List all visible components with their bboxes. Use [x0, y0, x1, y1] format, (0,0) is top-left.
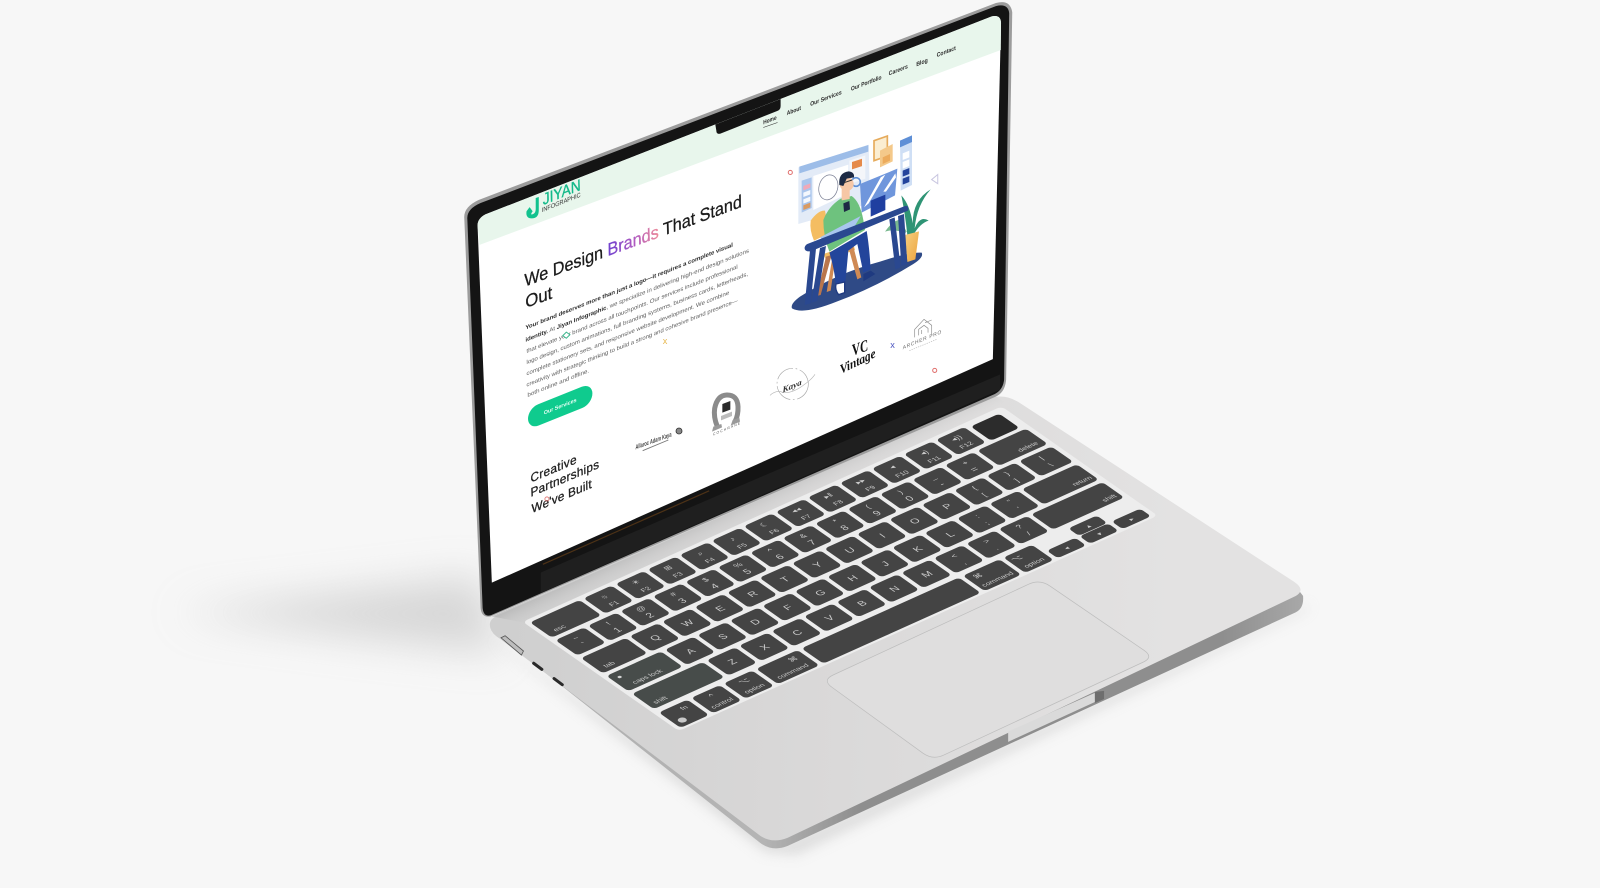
shift key row: <	[948, 552, 960, 559]
header band	[478, 16, 1001, 245]
number key row: -	[937, 481, 948, 488]
QWERTY key row: }	[1002, 470, 1012, 477]
function key row: F12	[958, 441, 976, 450]
bottom key row: command	[980, 571, 1016, 588]
number key row: )	[896, 489, 905, 495]
person torso	[823, 196, 865, 252]
QWERTY key row: R	[746, 590, 761, 599]
home key row: F	[781, 604, 796, 612]
decorative markers: x	[663, 336, 668, 346]
site logo: JIYAN	[543, 176, 581, 209]
hinge band	[541, 374, 1000, 593]
function key row: ☼	[597, 593, 611, 601]
decorative markers: x	[890, 340, 895, 350]
heading: We Design Brands That Stand	[524, 191, 742, 291]
bottom key row: option	[743, 683, 767, 695]
tools palette	[900, 135, 912, 191]
shift key row: N	[887, 585, 903, 594]
logo: VC Vintage: Vintage	[839, 346, 877, 377]
logo: Kaya signature: Kaya	[781, 376, 803, 395]
QWERTY key row	[581, 446, 1073, 673]
QWERTY key row: U	[843, 546, 858, 555]
bottom key row: option	[1023, 557, 1047, 569]
function key row	[530, 412, 1020, 638]
partnerships heading: Partnerships	[530, 457, 599, 500]
bottom key row: ^	[706, 693, 717, 699]
navigation: Home	[763, 114, 777, 126]
soft backdrop	[798, 145, 870, 224]
lid rim	[464, 2, 1012, 617]
home key row: "	[1005, 499, 1015, 505]
trackpad	[827, 582, 1149, 757]
lid bezel	[467, 5, 1009, 616]
home key row: '	[1015, 506, 1024, 511]
keyboard well	[523, 406, 1158, 731]
button: our services	[528, 383, 593, 430]
shift key row: >	[981, 538, 993, 545]
QWERTY key row: {	[970, 485, 980, 491]
base top deck	[490, 397, 1301, 840]
intro paragraph: that elevate your brand across all touchpoints. Our services include professional	[526, 265, 738, 355]
QWERTY key row: Q	[648, 633, 664, 643]
navigation: Our Services	[810, 89, 842, 108]
desk legs	[805, 214, 907, 305]
function key row: ⊞	[661, 564, 675, 572]
icon: logo mark	[526, 197, 539, 218]
number key row: _	[926, 474, 939, 481]
front thumb notch	[1008, 693, 1095, 742]
intro paragraph: complete stationery sets, and responsive website development. We combine	[526, 290, 730, 377]
shift key row	[632, 482, 1124, 709]
function key row: F2	[640, 586, 653, 593]
function key row: esc	[552, 624, 568, 633]
desk top	[805, 206, 908, 251]
navigation: Blog	[916, 57, 928, 68]
function key row: ☀	[629, 578, 643, 586]
intro paragraph: logo design, custom animations, full branding systems, business cards, letterheads,	[526, 271, 748, 366]
partnerships heading	[530, 452, 599, 516]
illustration: designer at desk	[792, 135, 931, 311]
number key row: ~	[570, 635, 582, 642]
bottom key row: ⌘	[786, 655, 800, 663]
function key row: F1	[608, 600, 621, 608]
button: our services: Our Services	[544, 398, 577, 417]
home key row: H	[846, 574, 861, 583]
bottom key row: ▸	[1128, 517, 1137, 522]
number key row: 4	[708, 582, 723, 591]
logo: Allaroc Adam Kaya: Allaroc Adam Kaya	[635, 431, 672, 452]
home key row: K	[911, 545, 926, 554]
bottom key row: ⌥	[736, 677, 752, 686]
QWERTY key row: P	[941, 502, 956, 511]
bottom key row: ▾	[1096, 531, 1105, 537]
chair	[810, 211, 861, 296]
person head	[839, 171, 854, 212]
shift key row: X	[758, 643, 773, 652]
camera notch	[715, 99, 781, 134]
home key row: G	[813, 589, 829, 598]
function key row: F11	[927, 456, 943, 464]
bottom key row: ◂	[1063, 546, 1072, 551]
navigation: Contact	[937, 45, 956, 59]
home key row: caps lock	[631, 669, 665, 685]
shift key row: Z	[726, 658, 740, 667]
bottom key row: control	[710, 697, 736, 710]
logo: VC Vintage: VC	[852, 335, 868, 360]
bottom key row: fn	[679, 705, 690, 711]
QWERTY key row: ]	[1012, 477, 1021, 483]
bottom key row: ▴	[1085, 524, 1094, 529]
intro paragraph	[525, 242, 749, 399]
function key row: F7	[800, 514, 813, 521]
number key row: &	[797, 532, 810, 540]
heading: Out	[525, 283, 552, 312]
partner logos	[635, 319, 941, 452]
function key row: ▸▸	[853, 477, 868, 486]
number key row: @	[633, 605, 648, 613]
screen	[478, 16, 1001, 583]
home key row: A	[684, 647, 699, 656]
icon: small diamond marker over paragraph	[563, 332, 570, 338]
bottom key row: ⌥	[1009, 554, 1025, 563]
cast shadow	[173, 577, 1311, 855]
shift key row: ,	[959, 560, 968, 566]
intro paragraph: Your brand deserves more than just a logo—it requires a complete visual	[525, 242, 733, 332]
navigation: Our Portfolio	[851, 74, 882, 93]
number key row: 0	[903, 495, 917, 503]
function key row: F6	[768, 528, 782, 536]
QWERTY key row: [	[980, 492, 990, 498]
laptop lid	[464, 2, 1012, 617]
number key row: =	[968, 466, 982, 474]
QWERTY key row: O	[908, 517, 924, 526]
QWERTY key row: T	[779, 576, 793, 584]
home key row: return	[1071, 476, 1094, 487]
number key row: 6	[773, 553, 788, 562]
home key row: J	[879, 560, 893, 568]
function key row: F9	[864, 485, 878, 492]
site logo	[526, 176, 581, 218]
design window	[799, 145, 868, 213]
number key row: (	[863, 504, 873, 510]
function key row: ☾	[757, 521, 771, 529]
number key row: 9	[871, 509, 885, 518]
function key row: ⌕	[695, 550, 706, 557]
number key row: `	[579, 641, 591, 649]
partnerships heading: Creative	[530, 452, 577, 486]
hinge shading	[492, 396, 1012, 624]
intro paragraph: creativity with strategic thinking to build a strong and cohesive brand presence—	[526, 298, 738, 389]
shift key row: ?	[1013, 523, 1025, 530]
shift key row: V	[823, 614, 838, 623]
function key row: ◂	[887, 464, 898, 470]
function key row: ♪	[727, 536, 738, 542]
home key row: :	[973, 513, 982, 519]
QWERTY key row: W	[680, 618, 698, 629]
QWERTY key row: tab	[602, 661, 617, 669]
navigation: Careers	[889, 63, 908, 77]
number key row: #	[668, 591, 679, 598]
logo: Kaya signature	[770, 368, 815, 400]
logo: Allaroc Adam Kaya	[635, 428, 682, 452]
person legs	[829, 231, 871, 285]
plant	[885, 189, 931, 235]
bottom key row: ⌘	[971, 572, 985, 580]
number key row: %	[731, 561, 745, 569]
intro paragraph: identity. At Jiyan Infographic , we specialize in delivering high-end design solutions	[525, 248, 749, 344]
function key row: ◂◂	[789, 506, 804, 514]
laptop base	[490, 396, 1303, 848]
plant pot	[905, 231, 919, 262]
home key row: ;	[983, 520, 992, 526]
bottom key row: command	[776, 663, 811, 680]
decorative markers	[545, 170, 938, 501]
number key row: ^	[765, 547, 776, 554]
tablet on lap	[820, 216, 861, 243]
function key row: ◂))	[949, 434, 965, 443]
ground ellipse	[792, 253, 922, 311]
number key row: 8	[838, 524, 852, 532]
number key row: 1	[611, 626, 625, 634]
shoes	[836, 271, 875, 295]
number key row: delete	[1017, 441, 1041, 453]
number key row: 5	[741, 568, 755, 576]
intro paragraph: both online and offline.	[527, 368, 589, 399]
screen edge reflection	[543, 491, 709, 564]
logo: Archer Pro: ARCHER PRO	[903, 329, 941, 351]
shift key row: C	[790, 629, 806, 638]
function key row: ◂)	[918, 449, 931, 457]
site logo: INFOGRAPHIC	[542, 192, 581, 214]
navigation: About	[787, 105, 801, 117]
function key row: F3	[672, 572, 685, 579]
shift key row: M	[919, 570, 936, 579]
bottom key row	[659, 501, 1151, 728]
QWERTY key row: I	[878, 533, 889, 540]
number key row: !	[604, 621, 613, 626]
function key row: F4	[704, 557, 717, 564]
logo: omega badge	[712, 395, 741, 437]
function key row: F5	[736, 543, 749, 550]
function key row: F8	[832, 499, 846, 507]
QWERTY key row: \	[1047, 462, 1056, 468]
logo: omega badge: COCHRANE	[713, 421, 741, 437]
number key row: 2	[644, 611, 658, 620]
shift key row: B	[855, 599, 870, 608]
orange documents	[874, 136, 893, 167]
ports	[501, 636, 562, 685]
QWERTY key row: Y	[811, 561, 826, 570]
function key row: F10	[894, 470, 911, 479]
home key row	[606, 464, 1099, 691]
number key row: +	[960, 459, 971, 466]
home key row: L	[944, 531, 958, 539]
number key row: 7	[806, 538, 820, 547]
number key row: *	[831, 518, 840, 524]
navigation	[763, 45, 956, 128]
number key row: $	[700, 576, 712, 583]
shift key row: shift	[652, 696, 670, 705]
QWERTY key row: |	[1037, 455, 1046, 461]
function key row: ▸‖	[821, 492, 835, 500]
keyboard	[523, 406, 1158, 731]
shift key row: .	[992, 545, 1001, 551]
shift key row: shift	[1101, 494, 1119, 503]
home key row: D	[748, 618, 764, 627]
number key row: 3	[676, 597, 690, 605]
right monitor	[860, 169, 897, 217]
shift key row: /	[1024, 530, 1034, 536]
base side edge	[492, 587, 1303, 848]
number key row	[555, 429, 1048, 656]
logo: Archer Pro	[903, 319, 941, 351]
QWERTY key row: E	[713, 604, 729, 613]
partnerships heading: We've Built	[531, 477, 592, 516]
home key row: S	[716, 633, 731, 641]
